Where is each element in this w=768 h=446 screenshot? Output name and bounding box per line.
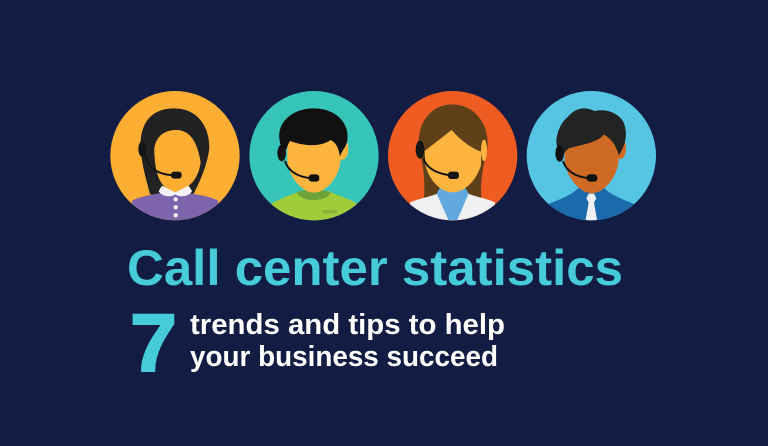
- big number 7: 7: [130, 298, 177, 389]
- infographic canvas: [110, 91, 656, 372]
- avatar: man with dark hair and tie on blue circle: [527, 91, 656, 225]
- subtitle: [190, 309, 505, 373]
- headset: [138, 141, 182, 179]
- avatar: woman with black hair on yellow circle: [110, 91, 240, 225]
- avatar: man with black hair on teal circle: [249, 91, 379, 225]
- subtitle: your business succeed: [190, 341, 498, 373]
- subtitle: trends and tips to help: [190, 309, 505, 341]
- headset: [277, 145, 319, 182]
- avatar: woman with brown hair on orange circle: [388, 91, 517, 225]
- headset: [555, 145, 597, 182]
- headset: [416, 141, 459, 179]
- title: Call center statistics: [127, 240, 623, 296]
